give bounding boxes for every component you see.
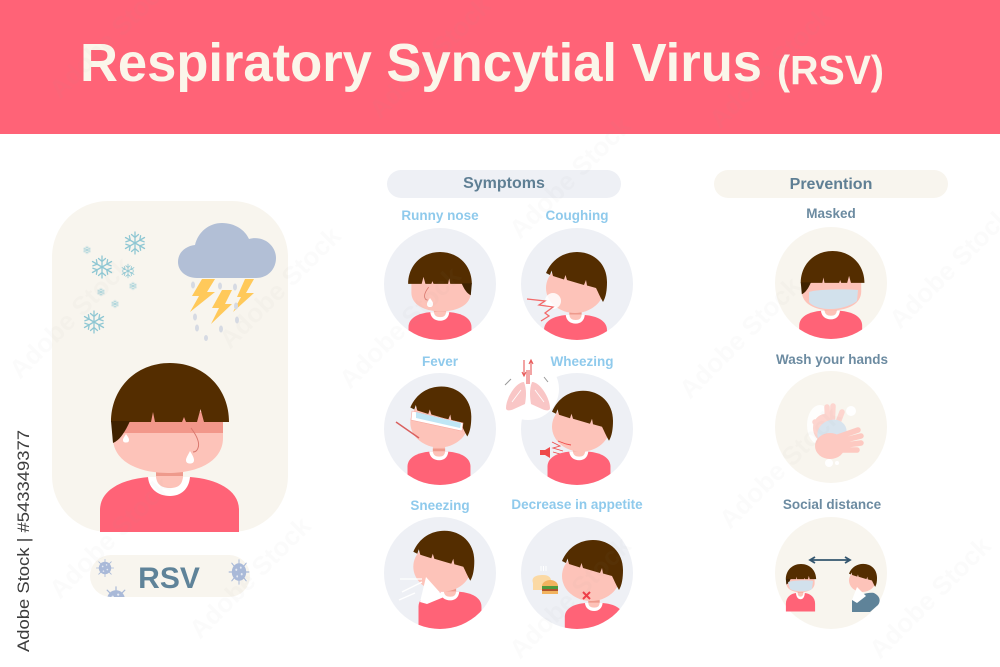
sneezing child	[849, 564, 880, 612]
stock watermark: Adobe Stock	[863, 530, 997, 664]
heading: symptoms	[387, 170, 621, 198]
heading: prevention: Prevention	[790, 176, 872, 193]
symptom: coughing	[521, 210, 633, 340]
symptom: decrease in appetite: Decrease in appetite	[511, 497, 643, 512]
RSV badge	[90, 555, 250, 597]
prevention: wash your hands: Wash your hands	[776, 352, 888, 367]
prevention: masked: Masked	[806, 206, 856, 221]
thermometer	[396, 422, 419, 438]
symptom: wheezing	[521, 354, 633, 494]
panel: RSV illustration	[52, 201, 288, 532]
title suffix: (RSV)	[777, 47, 884, 93]
cold compress	[411, 411, 463, 431]
RSV badge: RSV	[138, 562, 200, 595]
distance arrow	[810, 557, 850, 563]
stock watermark: Adobe Stock	[3, 250, 137, 384]
prevention: social distance: Social distance	[783, 497, 882, 512]
symptom: sneezing	[384, 498, 496, 634]
sick child	[100, 363, 239, 532]
face mask	[809, 289, 858, 309]
symptom: sneezing: Sneezing	[410, 498, 470, 513]
symptom: fever	[384, 354, 496, 494]
runny nose drop	[186, 451, 194, 464]
stock watermark: Adobe Stock	[333, 260, 467, 394]
snowflakes	[83, 232, 146, 333]
storm cloud with lightning	[178, 223, 276, 341]
heading: symptoms: Symptoms	[463, 175, 545, 192]
prevention: wash your hands	[775, 352, 888, 483]
title: Respiratory Syncytial Virus	[80, 33, 762, 93]
virus icons	[96, 559, 126, 597]
heading: prevention	[714, 170, 948, 198]
symptom: runny nose: Runny nose	[401, 208, 479, 223]
wheeze sound	[540, 447, 550, 458]
symptom: wheezing: Wheezing	[550, 354, 614, 369]
no eating mark	[583, 592, 590, 599]
symptom: fever: Fever	[422, 354, 459, 369]
prevention: masked	[775, 208, 887, 339]
tear	[123, 434, 129, 442]
symptom: coughing: Coughing	[546, 208, 608, 223]
masked child	[786, 564, 816, 612]
stock watermark: Adobe Stock	[213, 220, 347, 354]
soap and hands	[807, 405, 861, 467]
stock id: Adobe Stock | #543349377	[14, 430, 33, 652]
stock watermark: Adobe Stock	[503, 530, 637, 664]
stock watermark: Adobe Stock	[503, 110, 637, 244]
stock watermark: Adobe Stock	[673, 270, 807, 404]
symptom: decrease in appetite	[512, 499, 642, 629]
prevention: social distance	[775, 497, 887, 629]
tissue	[420, 577, 444, 604]
title banner	[0, 0, 1000, 134]
symptom: runny nose	[384, 210, 496, 340]
stock watermark: Adobe Stock	[43, 470, 177, 604]
stock watermark: Adobe Stock	[703, 0, 837, 134]
stock watermark: Adobe Stock	[183, 510, 317, 644]
food icon	[533, 575, 551, 590]
nose	[191, 428, 199, 452]
lungs inset	[497, 358, 559, 420]
stock watermark: Adobe Stock	[713, 400, 847, 534]
